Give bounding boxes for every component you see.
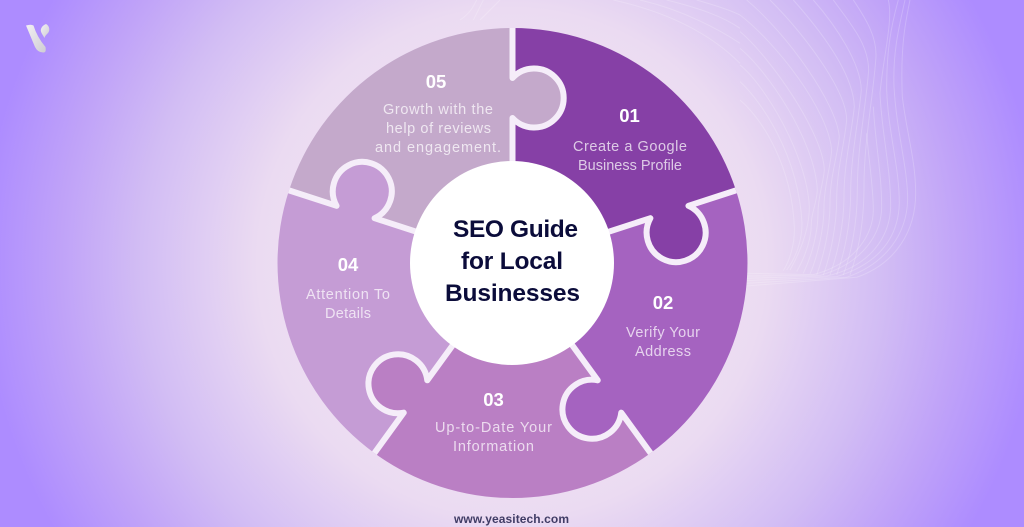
step 02 text: Verify Your [626,325,700,341]
step 03 text: 03 [483,389,504,410]
step 03 text [435,389,552,455]
logo drop [41,24,49,38]
piece 01 [512,28,736,263]
piece 03 [368,263,651,498]
logo [26,24,49,53]
title: for Local [461,248,563,275]
step 05 text: help of reviews [386,121,491,137]
center circle [410,161,614,365]
step 05 text: Growth with the [383,102,493,118]
piece 04 [278,162,512,453]
piece 02 [512,190,747,453]
step 04 text: Details [325,306,371,322]
website url: www.yeasitech.com [453,512,569,526]
step 03 text: Information [453,439,534,455]
step 01 text: 01 [619,105,640,126]
step 05 text [375,71,501,156]
puzzle seams [289,28,736,453]
step 01 text: Create a Google [573,139,687,155]
title: Businesses [445,280,580,307]
step 03 text: Up-to-Date Your [435,420,552,436]
puzzle wheel [278,28,747,498]
step 01 text: Business Profile [578,158,682,174]
step 04 text [306,254,390,322]
step 04 text: Attention To [306,287,390,303]
step 04 text: 04 [338,254,359,275]
step 01 text [573,105,687,174]
step 05 text: and engagement. [375,140,501,156]
decorative wave lines [460,0,916,286]
title: SEO Guide [453,216,578,243]
step 02 text: 02 [653,292,673,313]
step 05 text: 05 [426,71,446,92]
title [445,216,580,307]
logo stroke [26,25,46,53]
step 02 text [626,292,700,360]
piece 05 [289,28,564,263]
step 02 text: Address [635,344,691,360]
